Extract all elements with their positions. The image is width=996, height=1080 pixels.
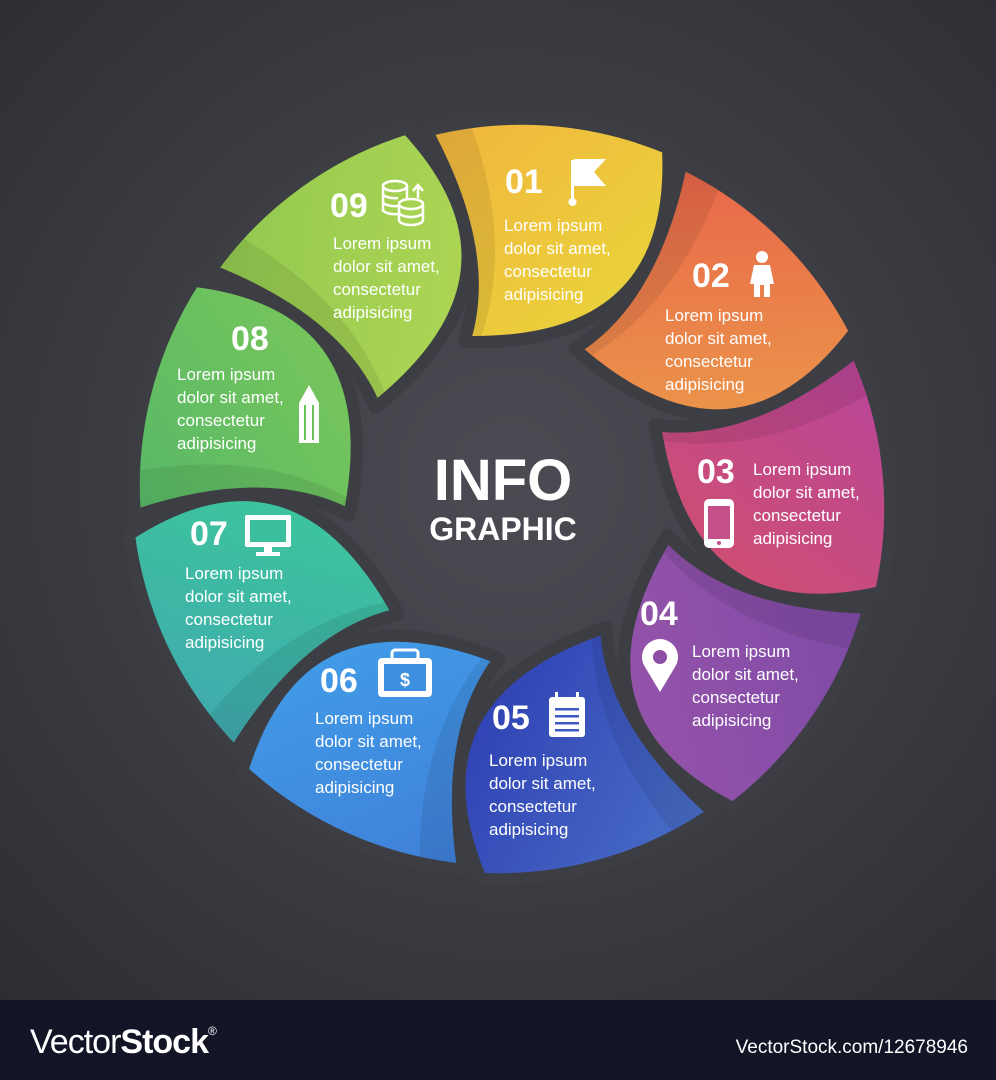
content 04: 04 — [640, 595, 678, 633]
footer logo: ® — [208, 1024, 217, 1038]
content 03 — [697, 453, 860, 548]
content 04: consectetur — [692, 688, 780, 707]
content 04 — [640, 595, 799, 730]
content 04: Lorem ipsum — [692, 642, 790, 661]
content 06: Lorem ipsum — [315, 709, 413, 728]
content 07: dolor sit amet, — [185, 587, 292, 606]
icon: monitor — [245, 515, 291, 556]
content 02: adipisicing — [665, 375, 744, 394]
title: GRAPHIC — [429, 511, 577, 547]
content 01: dolor sit amet, — [504, 239, 611, 258]
icon: map pin — [642, 639, 678, 692]
segment 02 — [546, 153, 875, 480]
icon: briefcase: $ — [400, 670, 410, 690]
content 09: dolor sit amet, — [333, 257, 440, 276]
icon: flag — [568, 159, 606, 206]
content 05: dolor sit amet, — [489, 774, 596, 793]
content 02: Lorem ipsum — [665, 306, 763, 325]
content 08: adipisicing — [177, 434, 256, 453]
title: INFO — [434, 448, 572, 513]
icon: pencil — [299, 385, 319, 443]
content 01: consectetur — [504, 262, 592, 281]
content 05: adipisicing — [489, 820, 568, 839]
content 02: consectetur — [665, 352, 753, 371]
icon: person — [750, 251, 774, 297]
content 08: Lorem ipsum — [177, 365, 275, 384]
content 06: adipisicing — [315, 778, 394, 797]
content 07: 07 — [190, 515, 228, 553]
content 08 — [177, 320, 319, 453]
content 03: consectetur — [753, 506, 841, 525]
content 03: adipisicing — [753, 529, 832, 548]
icon: briefcase — [378, 650, 432, 697]
content 08: dolor sit amet, — [177, 388, 284, 407]
content 03: dolor sit amet, — [753, 483, 860, 502]
content 06 — [315, 650, 432, 797]
content 03: 03 — [697, 453, 735, 491]
segment 09 — [203, 105, 532, 432]
content 01 — [504, 159, 611, 304]
content 06: consectetur — [315, 755, 403, 774]
content 06: dolor sit amet, — [315, 732, 422, 751]
content 09: adipisicing — [333, 303, 412, 322]
content 01: Lorem ipsum — [504, 216, 602, 235]
content 07: consectetur — [185, 610, 273, 629]
content 02 — [665, 251, 774, 394]
segment 06 — [232, 588, 536, 881]
content 02: 02 — [692, 257, 730, 295]
segment 08 — [123, 275, 385, 552]
content 09 — [330, 181, 440, 322]
icon: coins — [383, 181, 423, 225]
content 02: dolor sit amet, — [665, 329, 772, 348]
content 01: adipisicing — [504, 285, 583, 304]
content 09: 09 — [330, 187, 368, 225]
content 07: Lorem ipsum — [185, 564, 283, 583]
content 07: adipisicing — [185, 633, 264, 652]
segment 03 — [648, 349, 910, 626]
content 01: 01 — [505, 163, 543, 201]
footer logo: VectorStock — [30, 1023, 208, 1061]
content 05: 05 — [492, 699, 530, 737]
content 08: 08 — [231, 320, 269, 358]
icon: phone — [704, 499, 734, 548]
icon: calendar — [549, 692, 585, 737]
content 05: consectetur — [489, 797, 577, 816]
content 09: consectetur — [333, 280, 421, 299]
content 03: Lorem ipsum — [753, 460, 851, 479]
segment 01 — [426, 119, 669, 342]
title — [429, 448, 577, 547]
content 09: Lorem ipsum — [333, 234, 431, 253]
content 07 — [185, 515, 292, 652]
content 08: consectetur — [177, 411, 265, 430]
segment 07 — [103, 437, 418, 759]
footer url: VectorStock.com/12678946 — [736, 1037, 968, 1058]
content 05: Lorem ipsum — [489, 751, 587, 770]
content 04: dolor sit amet, — [692, 665, 799, 684]
content 06: 06 — [320, 662, 358, 700]
content 04: adipisicing — [692, 711, 771, 730]
content 05 — [489, 692, 596, 839]
segment 05 — [414, 614, 718, 907]
segment 04 — [565, 502, 879, 823]
